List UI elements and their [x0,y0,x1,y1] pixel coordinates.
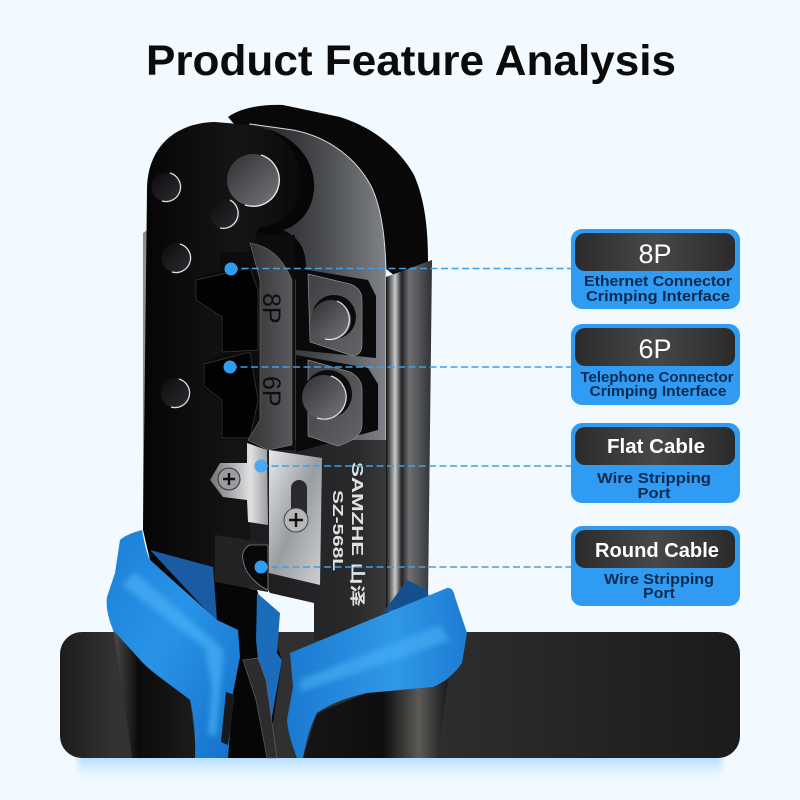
gray middle plate [250,124,386,450]
card: 6P: Crimping Interface [590,384,726,400]
lower die shadow [296,355,378,452]
bracket [210,443,268,525]
jaw label: 6P: 6P [257,376,285,407]
card: 8P: Crimping Interface [586,289,730,305]
left handle shade [150,550,217,622]
card: round cable [571,526,740,606]
stripping blade [269,450,322,585]
plate shadow [240,130,314,285]
card: flat cable: Wire Stripping [597,470,711,487]
callout line: 6P [224,360,571,374]
notch gap [268,593,313,632]
large rivet [227,154,279,206]
card: 6P: Telephone Connector [580,370,734,386]
callout line: 8P [224,262,571,276]
blade screw [284,508,308,532]
rivet mid left [162,244,191,273]
upper die block [308,274,362,356]
bottom shadow glow [78,745,722,785]
lower die block [308,360,362,446]
model text: SZ-568L [329,490,346,571]
left grip clip [221,692,235,745]
card: round cable: Round Cable [595,540,719,562]
right grip [303,680,448,758]
jaw cavity upper [196,268,258,352]
jaw cavity lower [204,352,258,438]
round cable die [215,535,268,592]
brand text: SAMZHE 山泽 [348,462,366,608]
inner blue lever [256,593,282,745]
black front plate [143,122,301,622]
card: round cable: Port [643,586,675,602]
central black lever [215,582,282,758]
title: Product Feature Analysis [146,37,676,85]
card: flat cable: Flat Cable [607,436,705,458]
back plate [228,105,428,280]
left sleeve highlight [122,572,224,735]
rivet top left [152,172,181,202]
card: flat cable [571,423,740,503]
card: 6P: 6P [638,334,672,364]
side strip [386,260,432,620]
card: 8P: Ethernet Connector [584,274,732,290]
right sleeve highlight [300,625,450,692]
crimping tool illustration [107,105,467,758]
left blue sleeve [107,530,240,758]
upper die shadow [296,268,376,358]
jaw label: 8P: 8P [257,293,285,324]
right shade [383,580,430,613]
card: flat cable: Port [638,485,671,502]
callout line: round cable [254,560,571,574]
card: 8P: 8P [638,239,672,269]
small rivet [210,199,240,229]
die button upper [311,295,356,340]
card: 8P [571,229,740,309]
die button lower [302,370,352,419]
left grip [113,628,197,758]
spring [243,658,277,758]
outer side edge [143,230,147,540]
jaw plate [248,243,292,450]
card: round cable: Wire Stripping [604,572,714,588]
bracket screw [218,468,240,490]
rivet low left [160,378,190,408]
callout line: flat cable [254,460,571,472]
round cable notch [243,545,268,590]
lower metal body [248,440,428,640]
jaw backing [195,235,295,450]
card: 6P [571,324,740,405]
right blue sleeve [287,588,467,758]
dark base panel [60,632,740,758]
blade slot [291,480,307,522]
